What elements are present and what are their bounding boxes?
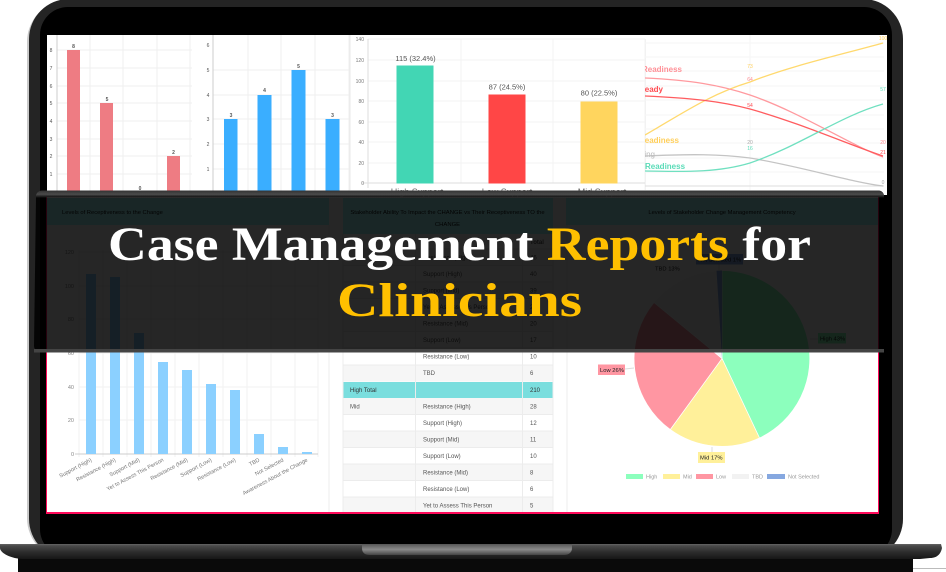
chart: readiness line chart: 21 — [880, 150, 886, 156]
chart: red bars: 6 — [50, 84, 53, 90]
panel header: stakeholder ability: Stakeholder Ability To Impact the CHANGE vs Their Receptiveness TO the — [350, 210, 545, 216]
chart: blue bars: 2 — [207, 142, 210, 148]
chart: receptiveness bars: 0 — [71, 452, 74, 458]
table: stakeholder ability: Support (High) — [423, 272, 462, 278]
chart: receptiveness bars: Resistance (Mid) — [150, 457, 189, 482]
panel header: receptiveness — [47, 198, 329, 225]
label: high: High 43% — [820, 336, 845, 342]
legend — [626, 474, 820, 480]
chart: receptiveness bars: Support (High) — [59, 457, 93, 480]
table: stakeholder ability: 28 — [530, 404, 537, 410]
chart: receptiveness bars: 20 — [68, 418, 74, 424]
chart: receptiveness bars — [59, 250, 318, 497]
label: mid — [698, 452, 725, 463]
panel header: stakeholder ability: CHANGE — [435, 222, 460, 228]
table: stakeholder ability: 10 — [530, 454, 537, 460]
chart: receptiveness bars: Awareness About the Change — [242, 457, 309, 497]
panel header: stakeholder ability — [343, 198, 553, 236]
chart: receptiveness bars: 40 — [68, 385, 74, 391]
chart: receptiveness bars: 60 — [68, 351, 74, 357]
chart: support bars: 80 — [358, 99, 364, 105]
chart: support bars: 115 (32.4%) — [395, 54, 436, 63]
chart: support bars: 120 — [356, 58, 364, 64]
table: stakeholder ability: 11 — [530, 438, 537, 444]
table: stakeholder ability: Support (High) — [423, 421, 462, 427]
chart: support bars: Low Support — [482, 187, 533, 197]
chart: red bars: 8 — [72, 44, 75, 50]
table: stakeholder ability: 210 — [530, 388, 541, 394]
legend: Mid — [683, 474, 692, 480]
table: stakeholder ability: Yet to Assess This Person — [423, 504, 492, 510]
chart: readiness line chart: Changing — [621, 150, 655, 159]
legend: Not Selected — [788, 474, 820, 480]
legend: High — [646, 474, 657, 480]
table: stakeholder ability: Resistance (Mid) — [423, 470, 468, 476]
chart: red bars: 2 — [172, 150, 175, 156]
chart: red bars — [50, 35, 192, 192]
title — [108, 218, 811, 327]
table: stakeholder ability: 17 — [530, 338, 537, 344]
chart: readiness line chart: 57 — [880, 87, 886, 93]
chart: blue bars: 6 — [207, 43, 210, 49]
label: not selected: Not Selected 1% — [698, 258, 741, 264]
table: stakeholder ability — [343, 234, 553, 512]
chart: readiness line chart: Ready — [639, 85, 664, 94]
title banner — [34, 190, 884, 352]
table: stakeholder ability: Resistance (Low) — [423, 354, 469, 360]
table: stakeholder ability: 8 — [530, 470, 534, 476]
table: stakeholder ability: 46 — [530, 256, 537, 262]
chart: red bars: 7 — [50, 66, 53, 72]
chart: competency pie — [598, 254, 846, 480]
chart: blue bars: 4 — [207, 93, 210, 99]
table: stakeholder ability: Resistance (High) — [423, 404, 471, 410]
laptop base — [0, 544, 946, 572]
chart: support bars: 140 — [356, 37, 364, 43]
chart: blue bars: 3 — [331, 113, 334, 119]
table: stakeholder ability: Total — [530, 240, 544, 246]
chart: blue bars: 5 — [207, 68, 210, 74]
chart: support bars: 100 — [356, 79, 364, 85]
table: stakeholder ability: Resistance (High) — [423, 256, 471, 262]
chart: receptiveness bars: Yet to Assess This Person — [106, 457, 165, 493]
chart: red bars: 8 — [50, 48, 53, 54]
chart: receptiveness bars: Not Selected — [254, 457, 285, 478]
chart: readiness line chart: 73 — [747, 64, 753, 70]
label: low — [598, 364, 625, 375]
chart: readiness line chart: Readiness — [642, 65, 683, 74]
chart: red bars: 5 — [50, 101, 53, 107]
legend: Low — [716, 474, 726, 480]
chart: blue bars: 1 — [207, 167, 210, 173]
chart: receptiveness bars: Resistance (High) — [76, 457, 117, 483]
chart: support bars: Mid Support — [578, 187, 627, 197]
chart: blue bars: 4 — [263, 88, 266, 94]
chart: readiness line chart: 54 — [747, 103, 753, 109]
chart: readiness line chart: 16 — [747, 146, 753, 152]
chart: support bars — [350, 35, 645, 197]
label: not selected — [696, 254, 743, 264]
chart: red bars: 5 — [106, 97, 109, 103]
chart: receptiveness bars: 100 — [65, 284, 74, 290]
chart: readiness line chart: Readiness — [645, 162, 686, 171]
label: tbd: TBD 13% — [655, 266, 680, 272]
title: Clinicians — [337, 274, 582, 327]
panel header: competency: Levels of Stakeholder Change Management Competency — [648, 210, 796, 216]
chart: receptiveness bars: 80 — [68, 317, 74, 323]
table: stakeholder ability: Support (Mid) — [423, 288, 459, 294]
label: mid: Mid 17% — [700, 456, 723, 462]
legend: TBD — [752, 474, 763, 480]
chart: readiness line chart: 20 — [747, 140, 753, 146]
table: stakeholder ability: Support (Mid) — [423, 438, 459, 444]
chart: blue bars: 5 — [297, 64, 300, 70]
chart: readiness line chart — [621, 35, 887, 190]
chart: blue bars — [207, 35, 350, 193]
table: stakeholder ability: 12 — [530, 421, 537, 427]
chart: readiness line chart: 100 — [879, 36, 887, 42]
label: high — [818, 333, 846, 344]
table: stakeholder ability: 6 — [530, 487, 534, 493]
table: stakeholder ability: Yet to Assess This Person — [423, 305, 492, 311]
table: stakeholder ability: 25 — [530, 305, 537, 311]
chart: support bars: 20 — [358, 161, 364, 167]
chart: red bars: 0 — [139, 186, 142, 192]
chart: receptiveness bars: TBD — [248, 457, 261, 468]
chart: red bars: 3 — [50, 137, 53, 143]
panel: top screen row — [47, 35, 887, 197]
chart: receptiveness bars: Support (Mid) — [109, 457, 141, 478]
chart: support bars: 87 (24.5%) — [489, 82, 526, 92]
table: stakeholder ability: 10 — [530, 354, 537, 360]
table: stakeholder ability: 39 — [530, 288, 537, 294]
title: Case Management Reports for — [108, 218, 811, 271]
panel: bottom screen row — [46, 197, 879, 514]
table: stakeholder ability: TBD — [423, 371, 436, 377]
table: stakeholder ability: 5 — [530, 504, 534, 510]
table: stakeholder ability: Support (Low) — [423, 338, 461, 344]
chart: readiness line chart: 20 — [880, 140, 886, 146]
table: stakeholder ability: Support (Low) — [423, 454, 461, 460]
label: low: Low 26% — [600, 368, 624, 374]
chart: receptiveness bars: Support (Low) — [180, 457, 213, 479]
table: stakeholder ability: Mid — [350, 404, 360, 410]
chart: support bars: High Support — [391, 187, 444, 197]
chart: blue bars: 3 — [230, 113, 233, 119]
chart: support bars: 40 — [358, 140, 364, 146]
table: stakeholder ability: Resistance (Mid) — [423, 322, 468, 328]
chart: support bars: 0 — [361, 181, 364, 187]
chart: readiness line chart: Readiness — [639, 136, 680, 145]
chart: support bars: 80 (22.5%) — [581, 88, 618, 98]
chart: receptiveness bars: 120 — [65, 250, 74, 256]
table: stakeholder ability: 6 — [530, 371, 534, 377]
panel header: competency — [566, 198, 878, 225]
chart: support bars: 60 — [358, 120, 364, 126]
panel header: receptiveness: Levels of Receptiveness to the Change — [62, 210, 163, 216]
chart: blue bars: 3 — [207, 117, 210, 123]
chart: red bars: 4 — [50, 119, 53, 125]
table: stakeholder ability: 40 — [530, 272, 537, 278]
chart: red bars: 1 — [50, 172, 53, 178]
chart: red bars: 2 — [50, 154, 53, 160]
chart: receptiveness bars: Resistance (Low) — [197, 457, 237, 483]
chart: readiness line chart: 64 — [747, 77, 753, 83]
chart: readiness line chart: 0 — [882, 180, 885, 186]
table: stakeholder ability: Resistance (Low) — [423, 487, 469, 493]
table: stakeholder ability: High Total — [350, 388, 377, 394]
table: stakeholder ability: 20 — [530, 322, 537, 328]
